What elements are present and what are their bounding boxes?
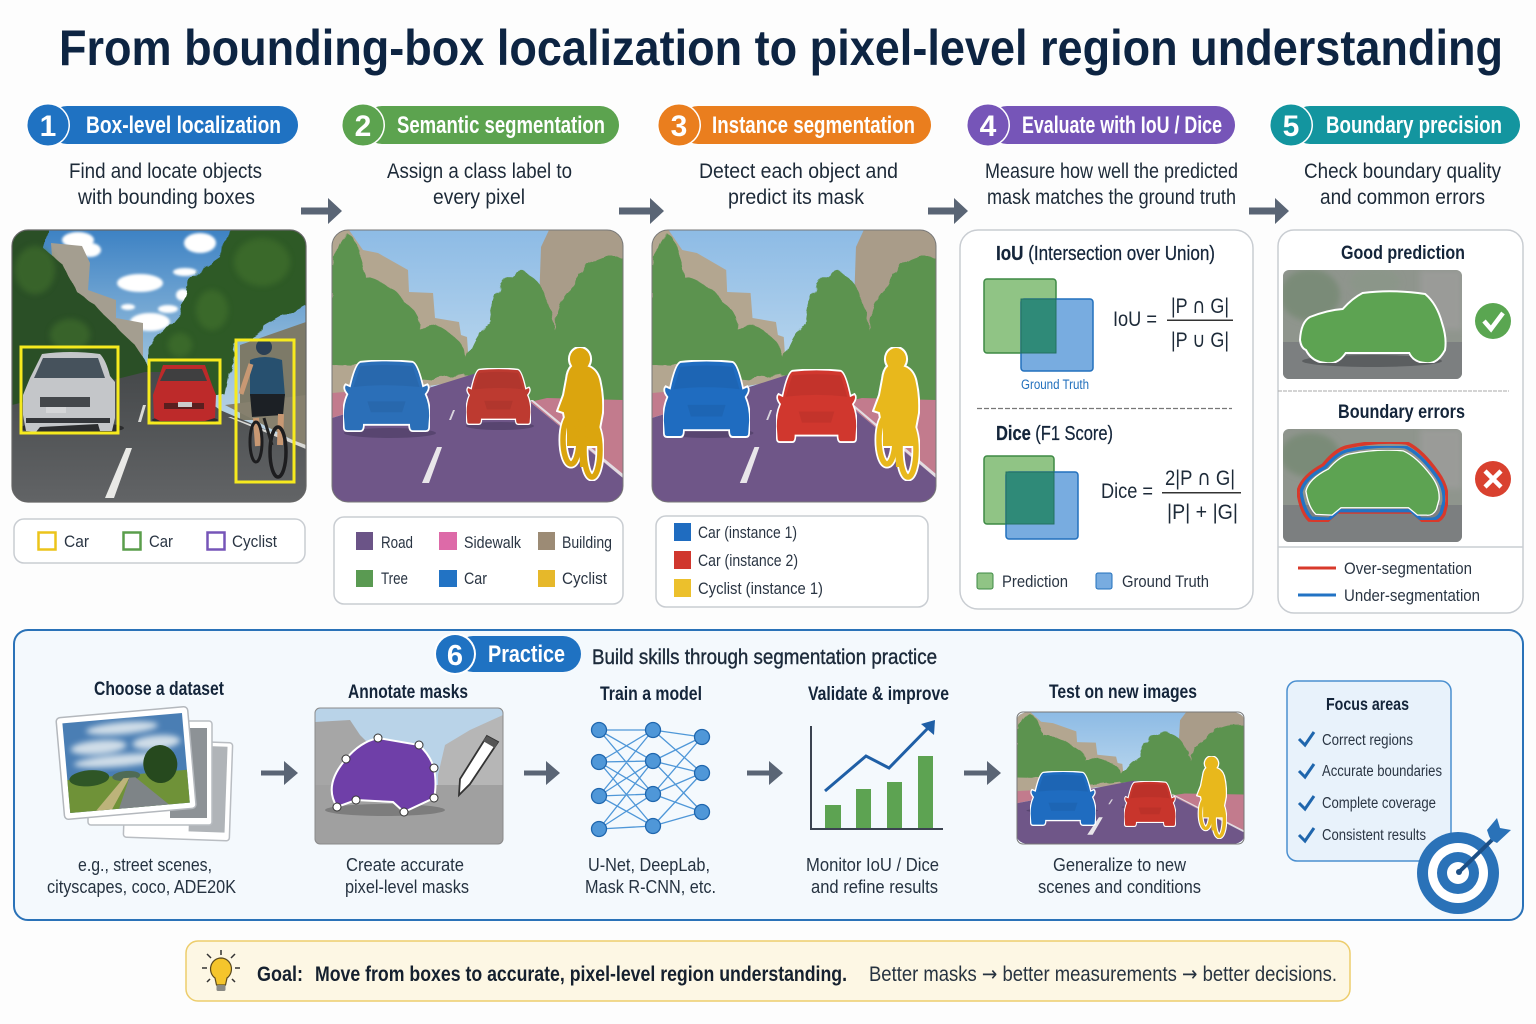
- goal banner: [186, 941, 1350, 1001]
- chart: validation trend: [811, 720, 943, 829]
- step 5 description: and common errors: [1320, 186, 1485, 209]
- step: validate caption: [806, 854, 939, 897]
- focus areas box: Accurate boundaries: [1322, 763, 1442, 780]
- legend: semantic classes: Building: [562, 533, 612, 552]
- step: dataset caption: [47, 854, 237, 897]
- goal text: Move from boxes to accurate, pixel-level region understanding.: [315, 963, 847, 986]
- boundary errors image: [1280, 429, 1462, 542]
- step: annotate caption: Create accurate: [346, 854, 464, 875]
- goal text: Better masks → better measurements → better decisions.: [869, 962, 1337, 986]
- car instance 1 mask: [663, 360, 750, 437]
- step 2 header: [341, 103, 619, 147]
- blue car mask: [343, 360, 430, 431]
- step 2 header: Semantic segmentation: [397, 112, 605, 139]
- practice header: 6: [447, 640, 463, 672]
- Dice heading: Dice (F1 Score): [996, 423, 1113, 445]
- arrow 4 to 5: [1249, 198, 1289, 224]
- good prediction image: [1280, 268, 1462, 379]
- cyclist: [241, 339, 286, 477]
- boundary errors heading: Boundary errors: [1338, 402, 1465, 423]
- icon: light bulb: [202, 950, 240, 991]
- icon: dataset photo stack: [56, 706, 233, 841]
- step 2 description: Assign a class label to: [387, 160, 572, 183]
- step 5 description: [1304, 160, 1501, 209]
- step 3 description: predict its mask: [728, 186, 864, 209]
- goal text: Goal:: [257, 963, 303, 986]
- legend: bounding boxes: Car: [149, 532, 173, 551]
- legend: semantic classes: Cyclist: [562, 569, 607, 588]
- check icon: [1475, 303, 1511, 339]
- panel: semantic segmentation scene: [332, 230, 628, 502]
- step 3 description: Detect each object and: [699, 160, 898, 183]
- Dice formula: Dice =: [1101, 480, 1153, 503]
- step 5 header: 5: [1283, 110, 1299, 143]
- step: dataset caption: e.g., street scenes,: [78, 854, 212, 875]
- arrow: validate to test: [964, 761, 1001, 785]
- practice header: Practice: [488, 641, 565, 668]
- good prediction heading: Good prediction: [1341, 243, 1465, 264]
- arrow 3 to 4: [928, 198, 968, 224]
- IoU formula: |P ∩ G|: [1171, 294, 1229, 318]
- legend: instances: [656, 516, 928, 607]
- step 1 description: with bounding boxes: [77, 186, 255, 209]
- step 1 description: Find and locate objects: [69, 160, 262, 183]
- icon: pencil: [459, 736, 498, 795]
- step 5 description: Check boundary quality: [1304, 160, 1501, 183]
- IoU and Dice legend: Prediction: [1002, 572, 1068, 591]
- step 4 header: 4: [980, 110, 997, 143]
- arrow: annotate to train: [524, 761, 560, 785]
- panel: boundary precision: [1278, 230, 1523, 613]
- step 5 header: [1269, 103, 1520, 147]
- legend: semantic classes: [334, 517, 623, 604]
- step 4 description: Measure how well the predicted: [985, 160, 1238, 183]
- IoU and Dice legend: [977, 572, 1209, 591]
- legend: semantic classes: Sidewalk: [464, 533, 521, 552]
- Dice formula: |P| + |G|: [1167, 501, 1238, 524]
- step: train a model heading: Train a model: [600, 684, 702, 705]
- red car mask: [466, 368, 531, 424]
- step: test heading: Test on new images: [1049, 682, 1197, 703]
- annotate masks image: [315, 708, 503, 844]
- error icon: [1475, 461, 1511, 497]
- legend: bounding boxes: Cyclist: [232, 532, 277, 551]
- step: train caption: Mask R-CNN, etc.: [585, 876, 716, 897]
- step 1 description: [69, 160, 262, 209]
- goal text: [257, 962, 1337, 986]
- panel: IoU and Dice: [960, 230, 1253, 609]
- panel: practice: [14, 630, 1523, 920]
- step: validate caption: Monitor IoU / Dice: [806, 854, 939, 875]
- panel: instance segmentation scene: [652, 230, 941, 502]
- practice header: [434, 633, 581, 675]
- step 4 description: [985, 160, 1238, 209]
- IoU formula: IoU =: [1113, 308, 1157, 331]
- Dice formula: 2|P ∩ G|: [1165, 466, 1235, 490]
- step: choose a dataset heading: Choose a dataset: [94, 679, 225, 700]
- icon: neural network: [592, 722, 710, 836]
- step 3 header: Instance segmentation: [712, 112, 915, 139]
- cyclist instance mask: [873, 347, 919, 477]
- IoU and Dice legend: Ground Truth: [1122, 572, 1209, 591]
- legend: instances: Car (instance 2): [698, 551, 798, 570]
- arrow 2 to 3: [619, 198, 664, 224]
- panel: street photo with bounding boxes: [6, 226, 312, 502]
- Dice Venn diagram: [984, 456, 1078, 539]
- cyclist mask: [557, 347, 603, 477]
- step 3 header: [657, 103, 931, 147]
- IoU formula: [1113, 294, 1233, 352]
- step: test caption: scenes and conditions: [1038, 876, 1201, 897]
- step 4 header: Evaluate with IoU / Dice: [1022, 112, 1222, 139]
- IoU heading: IoU (Intersection over Union): [996, 243, 1215, 265]
- legend: instances: Car (instance 1): [698, 523, 797, 542]
- step: train caption: U-Net, DeepLab,: [588, 854, 710, 875]
- step 1 header: 1: [40, 110, 56, 143]
- step 4 description: mask matches the ground truth: [987, 186, 1236, 209]
- focus areas box: Focus areas: [1326, 694, 1409, 714]
- step: validate heading: Validate & improve: [808, 684, 949, 705]
- step 4 header: [966, 103, 1235, 147]
- step 1 header: [26, 103, 298, 147]
- step 3 description: [699, 160, 898, 209]
- arrow: train to validate: [747, 761, 783, 785]
- IoU Venn diagram: [984, 279, 1093, 392]
- focus areas box: Consistent results: [1322, 827, 1426, 844]
- Dice formula: [1101, 466, 1241, 524]
- legend: semantic classes: Road: [381, 533, 413, 552]
- step: annotate caption: [345, 854, 469, 897]
- step 2 description: every pixel: [433, 186, 525, 209]
- legend: semantic classes: Tree: [381, 569, 408, 588]
- step: annotate masks heading: Annotate masks: [348, 682, 468, 703]
- step: validate caption: and refine results: [811, 876, 938, 897]
- IoU formula: |P ∪ G|: [1171, 328, 1229, 352]
- focus areas box: Correct regions: [1322, 732, 1413, 749]
- practice subtitle: Build skills through segmentation practice: [592, 646, 937, 669]
- step: test caption: [1038, 854, 1201, 897]
- step: test caption: Generalize to new: [1053, 854, 1187, 875]
- focus areas box: Complete coverage: [1322, 795, 1436, 812]
- arrow 1 to 2: [301, 198, 342, 224]
- boundary error legend: [1298, 559, 1480, 605]
- car instance 2 mask: [776, 369, 857, 442]
- boundary error legend: Under-segmentation: [1344, 586, 1480, 605]
- legend: bounding boxes: Car: [64, 532, 89, 551]
- silver car: [23, 352, 115, 432]
- step 2 description: [387, 160, 572, 209]
- legend: bounding boxes: [14, 519, 305, 563]
- step 3 header: 3: [671, 110, 687, 143]
- IoU Venn diagram: Ground Truth: [1021, 377, 1089, 392]
- bounding boxes: [21, 340, 294, 482]
- legend: semantic classes: Car: [464, 569, 487, 588]
- red car: [153, 365, 216, 421]
- boundary error legend: Over-segmentation: [1344, 559, 1472, 578]
- arrow: dataset to annotate: [261, 761, 298, 785]
- icon: target with dart: [1417, 818, 1511, 914]
- legend: instances: Cyclist (instance 1): [698, 579, 823, 598]
- step 2 header: 2: [355, 110, 371, 143]
- test image: [1017, 712, 1248, 844]
- step: train caption: [585, 854, 716, 897]
- step 1 header: Box-level localization: [86, 112, 281, 139]
- focus areas box: [1287, 681, 1451, 861]
- step: dataset caption: cityscapes, coco, ADE20K: [47, 876, 237, 897]
- step: annotate caption: pixel-level masks: [345, 876, 469, 897]
